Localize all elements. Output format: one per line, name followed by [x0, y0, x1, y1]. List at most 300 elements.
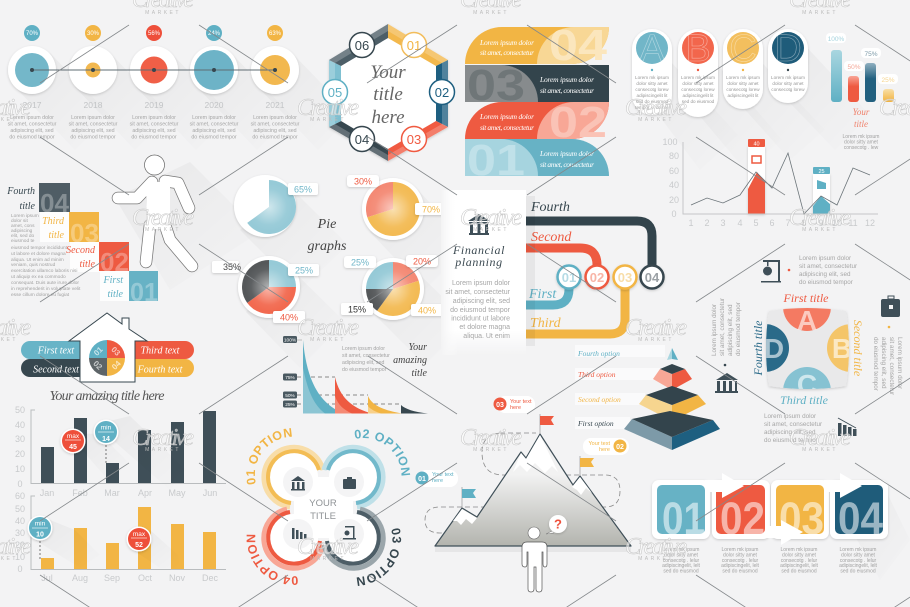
panel: timeline 2017-2021: adipiscing elit, sed	[10, 128, 54, 134]
chart: dark bars Jan-Jun: 14	[102, 436, 110, 443]
panel: mountain: 03	[496, 402, 504, 409]
chart: line chart 1-12: 5	[753, 218, 759, 228]
panel: square diagram A B C D: B	[832, 333, 852, 364]
panel: mountain: here	[432, 478, 443, 484]
panel: numbered steps with arrows: sed do eiusmod	[781, 568, 817, 574]
panel: square diagram A B C D: adipiscing elit, sed	[799, 271, 851, 278]
panel: ABCD pills: Lorem mk ipsum	[681, 75, 715, 80]
panel: stair steps with titles: ut aliquip ex ea commodo	[11, 274, 66, 280]
panel: stair steps with titles: dolor sit	[11, 218, 28, 224]
chart: cylinders: 100%	[828, 36, 845, 43]
panel: financial planning pipes: 04	[645, 270, 660, 285]
chart: dark bars Jan-Jun: 50	[15, 405, 25, 415]
panel: financial planning pipes: 03	[618, 270, 632, 285]
chart: curve peaks: Lorem ipsum dolor	[342, 346, 385, 352]
chart: line chart 1-12: 20	[669, 195, 679, 205]
panel: financial planning card: sit amet, consectetur	[445, 289, 511, 296]
panel: ABCD pills: adipiscingelit lit	[637, 93, 668, 98]
panel: timeline 2017-2021	[8, 25, 352, 150]
panel: mountain: here	[510, 405, 521, 411]
panel: ABCD pills: consecotg lorew	[681, 87, 715, 92]
panel: financial planning card	[441, 190, 535, 355]
chart: line chart 1-12: 2	[704, 218, 710, 228]
panel: four-option clover	[246, 428, 410, 586]
watermarks: MARKET	[310, 117, 346, 123]
panel: mountain: Your text	[510, 399, 532, 405]
chart: dark bars Jan-Jun: 0	[17, 479, 23, 489]
chart: dark bars Jan-Jun: max	[67, 433, 80, 440]
watermarks: Creative	[132, 425, 194, 451]
panel: numbered ribbons: 01	[467, 136, 525, 185]
chart: yellow bars Jul-Dec: 10	[36, 532, 44, 538]
panel: stair steps with titles: 03	[70, 218, 99, 248]
panel: hexagon: 04	[355, 132, 369, 147]
chart: curve peaks: 100%	[284, 338, 297, 344]
panel: stair steps with titles: Second	[66, 245, 96, 256]
panel: house with labels: Third text	[141, 346, 180, 356]
icon: briefcase	[881, 296, 900, 317]
panel: timeline 2017-2021: Lorem ipsum dolor	[10, 115, 54, 121]
panel: square diagram A B C D: do eiusmod tempor	[872, 337, 879, 391]
watermarks: MARKET	[310, 556, 346, 562]
panel: house with labels	[21, 313, 194, 404]
panel: financial planning card: aliqua. Ut enim	[463, 333, 510, 340]
panel: square diagram A B C D: Fourth title	[751, 320, 765, 376]
watermarks: MARKET	[473, 10, 509, 16]
panel: timeline 2017-2021: do eiusmod tempor	[9, 134, 55, 140]
panel: timeline 2017-2021: do eiusmod tempor	[70, 134, 116, 140]
panel: timeline 2017-2021: Lorem ipsum dolor	[192, 115, 236, 121]
panel: numbered steps with arrows: dolor sitty amet	[723, 552, 758, 558]
icon: running person	[115, 155, 260, 290]
panel: timeline 2017-2021: Lorem ipsum dolor	[253, 115, 297, 121]
panel: ABCD pills: sed do eiusmod	[682, 99, 715, 104]
panel: house with labels: 02	[91, 359, 104, 372]
panel: square diagram A B C D: Lorem ipsum dolor	[711, 304, 718, 356]
panel: numbered steps with arrows: Lorem mk ipsum	[722, 547, 758, 553]
panel: numbered ribbons: 03	[467, 61, 525, 110]
chart: line chart 1-12: 7	[785, 218, 791, 228]
chart: pie 70/30: 70%	[422, 204, 440, 214]
panel: house with labels: First text	[37, 346, 74, 356]
watermarks: Creative	[460, 205, 522, 231]
panel: financial planning pipes: Third	[530, 316, 562, 331]
chart: yellow bars Jul-Dec: 30	[15, 528, 25, 538]
panel: stair steps with titles: Fourth	[6, 186, 35, 197]
panel: stair steps with titles: title	[48, 230, 65, 241]
chart: yellow bars Jul-Dec: min	[35, 520, 46, 528]
chart: curve peaks: Your	[408, 342, 427, 353]
chart: yellow bars Jul-Dec: 20	[15, 540, 25, 550]
chart: dark bars Jan-Jun: 20	[15, 449, 25, 459]
watermarks: MARKET	[310, 337, 346, 343]
panel: numbered steps with arrows: dolor sitty amet	[841, 552, 876, 558]
panel: stair steps with titles: in reprehenderit in voluptate velit	[11, 286, 81, 292]
panel: hexagon	[322, 24, 454, 161]
panel: stair steps with titles: First	[103, 275, 123, 286]
panel: four-option clover: 04 OPTION	[246, 534, 298, 585]
panel: financial planning card: Lorem ipsum dolor	[452, 280, 511, 287]
panel: stair steps with titles: amet, cons	[11, 223, 35, 229]
panel: square diagram A B C D: do eiusmod tempor	[735, 302, 742, 356]
panel: stair steps with titles	[6, 183, 158, 307]
watermarks: Creative	[297, 315, 359, 341]
panel: financial planning pipes: Second	[531, 230, 572, 245]
panel: ABCD pills: Lorem mk ipsum	[635, 75, 669, 80]
panel: financial planning card: planning	[454, 255, 503, 269]
chart: cylinders: consecotg . lew	[844, 145, 879, 151]
watermarks: MARKET	[473, 447, 509, 453]
panel: four-option clover: YOUR	[309, 498, 337, 509]
panel: pyramid: First option	[577, 419, 614, 428]
panel: ABCD pills: Lorem mk ipsum	[771, 75, 805, 80]
panel: house with labels: Second text	[33, 364, 79, 376]
panel: numbered steps with arrows: consecotg . lelur	[840, 558, 877, 564]
panel: financial planning pipes: 01	[562, 270, 576, 285]
panel: stair steps with titles: consequat. Duis aute irure dolor	[11, 280, 79, 286]
panel: hexagon: Your	[370, 62, 406, 83]
panel: hexagon: 05	[328, 85, 342, 100]
panel: square diagram A B C D: adipiscing elit, sed	[880, 337, 887, 389]
panel: stair steps with titles: title	[19, 201, 36, 212]
panel: ABCD pills: dolor sitty amet	[636, 81, 668, 86]
panel: financial planning pipes: First	[528, 287, 557, 302]
panel: timeline 2017-2021: 2018	[84, 100, 103, 110]
panel: timeline 2017-2021: 2020	[205, 100, 224, 110]
panel: numbered steps with arrows: sed do eiusmod	[722, 568, 758, 574]
panel: house with labels: 01	[92, 345, 105, 358]
chart: curve peaks: adipiscing elit, sed	[342, 360, 385, 366]
panel: pyramid: Third option	[578, 370, 616, 379]
chart: dark bars Jan-Jun: 30	[15, 434, 25, 444]
panel: mountain: Your text	[432, 472, 454, 478]
panel: hexagon: 02	[435, 85, 449, 100]
panel: hexagon: here	[371, 107, 405, 128]
chart: pie 20/40/15/25: 20%	[413, 256, 431, 266]
chart: yellow bars Jul-Dec: 0	[17, 564, 23, 574]
panel: numbered ribbons: Lorem ipsum dolor	[539, 75, 594, 84]
panel: stair steps with titles: eiusmod tempor incididunt	[11, 245, 68, 251]
panel: timeline 2017-2021: do eiusmod tempor	[191, 134, 237, 140]
chart: line chart 1-12: 100	[662, 137, 678, 147]
panel: ABCD pills: consecotg lorew	[726, 87, 760, 92]
panel: stair steps with titles: elit, sed do	[11, 233, 35, 239]
panel: numbered steps with arrows: 02	[720, 493, 765, 544]
panel: stair steps with titles: esse cillum dolore eu fugiat	[11, 292, 70, 298]
panel: four-option clover: TITLE	[310, 511, 336, 522]
panel: numbered steps with arrows: 01	[662, 493, 705, 544]
panel: timeline 2017-2021: adipiscing elit, sed	[192, 128, 236, 134]
panel: ABCD pills: D	[774, 28, 802, 70]
panel: ABCD pills: Lorem mk ipsum	[726, 75, 760, 80]
panel: timeline 2017-2021: 2021	[266, 100, 285, 110]
panel: stair steps with titles: 04	[40, 188, 70, 218]
watermarks: MARKET	[638, 337, 674, 343]
chart: dark bars Jan-Jun: Feb	[72, 488, 88, 498]
panel: timeline 2017-2021: sit amet, consectetur	[130, 122, 179, 128]
icon: crane	[761, 260, 781, 282]
panel: financial planning pipes: 02	[590, 270, 604, 285]
panel: numbered ribbons: sit amet, consectetur	[480, 123, 534, 132]
panel: ABCD pills: B	[685, 28, 711, 70]
panel: numbered ribbons: 04	[549, 21, 608, 70]
panel: mountain: 01	[418, 476, 426, 483]
chart: yellow bars Jul-Dec: Jul	[41, 573, 53, 583]
chart: curve peaks: 75%	[285, 375, 296, 381]
panel: hexagon: 03	[407, 132, 421, 147]
chart: pie 65%: 65%	[294, 184, 312, 194]
chart: pie 20/40/15/25: 40%	[418, 306, 436, 316]
panel: timeline 2017-2021: 30%	[87, 31, 100, 37]
panel: timeline 2017-2021: 2019	[145, 100, 164, 110]
watermarks: Creative	[625, 315, 687, 341]
panel: numbered steps with arrows: consecotg . lelur	[722, 558, 759, 564]
watermarks: MARKET	[802, 227, 838, 233]
chart: dark bars Jan-Jun: min	[101, 424, 112, 432]
panel: house with labels: 03	[109, 345, 122, 358]
chart: yellow bars Jul-Dec: 52	[135, 542, 143, 549]
panel: ABCD pills	[632, 28, 870, 170]
panel: square diagram A B C D: First title	[782, 291, 829, 305]
watermarks: MARKET	[145, 227, 181, 233]
panel: pyramid: Second option	[578, 395, 621, 404]
panel: square diagram A B C D: D	[764, 333, 784, 364]
panel: timeline 2017-2021: adipiscing elit, sed	[253, 128, 297, 134]
panel: ABCD pills: dolor sitty amet	[772, 81, 804, 86]
watermarks: Creative	[789, 425, 851, 451]
chart: line chart 1-12: 1	[688, 218, 694, 228]
icon: descending bars	[838, 418, 856, 436]
panel: pyramid	[575, 345, 720, 450]
chart: pie 65%	[233, 175, 319, 240]
panel: mountain: Your text	[588, 441, 610, 447]
chart: curve peaks: 50%	[285, 393, 296, 399]
panel: timeline 2017-2021: adipiscing elit, sed	[132, 128, 176, 134]
chart: dark bars Jan-Jun	[15, 405, 226, 498]
watermarks: MARKET	[638, 556, 674, 562]
chart: line chart 1-12	[662, 137, 878, 228]
panel: timeline 2017-2021: Lorem ipsum dolor	[132, 115, 176, 121]
panel: numbered steps with arrows: adipiscingelit, lelt	[839, 563, 878, 569]
panel: hexagon: 06	[355, 38, 369, 53]
panel: numbered ribbons: Lorem ipsum dolor	[479, 38, 534, 47]
chart: yellow bars Jul-Dec: max	[133, 531, 146, 538]
panel: numbered steps with arrows: adipiscingelit, lelt	[721, 563, 760, 569]
chart: yellow bars Jul-Dec: Nov	[169, 573, 185, 583]
panel: timeline 2017-2021: 24%	[208, 31, 221, 37]
chart: curve peaks: do eiusmod tempor	[342, 367, 387, 373]
panel: numbered steps with arrows: dolor sitty amet	[782, 552, 817, 558]
chart: cylinders: 50%	[847, 64, 861, 71]
panel: four-option clover: 02 OPTION	[354, 429, 410, 476]
chart: pie 25/40/35	[212, 256, 345, 368]
chart: line chart 1-12: 3	[720, 218, 726, 228]
text: pie graphs title: graphs	[308, 239, 347, 254]
panel: ABCD pills: adipiscingelit lit	[683, 93, 714, 98]
panel: numbered steps with arrows: adipiscingelit, lelt	[780, 563, 819, 569]
chart: pie 25/40/35: 25%	[295, 266, 313, 276]
panel: financial planning card: adipiscing elit, sed	[453, 298, 510, 305]
chart: cylinders: title	[854, 119, 868, 129]
panel: numbered steps with arrows: Lorem mk ipsum	[840, 547, 876, 553]
panel: ABCD pills: dolor sitty amet	[682, 81, 714, 86]
chart: dark bars Jan-Jun: 45	[69, 444, 77, 451]
panel: numbered steps with arrows: sed do eiusmod	[663, 568, 699, 574]
panel: square diagram A B C D	[711, 255, 903, 444]
panel: timeline 2017-2021: 56%	[148, 31, 161, 37]
panel: hexagon: title	[373, 84, 403, 105]
panel: square diagram A B C D: sit amet, consectetur	[799, 263, 857, 270]
watermarks: MARKET	[638, 117, 674, 123]
chart: yellow bars Jul-Dec: Oct	[138, 573, 152, 583]
panel: stair steps with titles: ut labore et dolore magna	[11, 251, 66, 257]
chart: line chart 1-12: 40	[669, 180, 679, 190]
chart: line chart 1-12: 11	[848, 218, 858, 228]
watermarks: MARKET	[145, 10, 181, 16]
chart: cylinders	[826, 33, 898, 151]
panel: numbered ribbons: Lorem ipsum dolor	[539, 149, 594, 158]
watermarks: Creative	[132, 205, 194, 231]
chart: pie 20/40/15/25: 25%	[351, 258, 369, 268]
watermarks: Creative	[297, 95, 359, 121]
chart: curve peaks	[283, 336, 428, 414]
icon: bank	[715, 373, 738, 393]
panel: square diagram A B C D: do eiusmod tempor	[764, 437, 818, 444]
panel: stair steps with titles: aliqua. Ut enim ad minim	[11, 257, 64, 263]
chart: curve peaks: title	[411, 368, 428, 379]
panel: numbered ribbons: 02	[549, 98, 607, 147]
panel: pyramid: Fourth option	[577, 349, 620, 358]
panel: square diagram A B C D: Lorem ipsum dolor	[799, 255, 851, 262]
chart: pie 70/30: 30%	[354, 176, 372, 186]
watermarks: MARKET	[802, 10, 838, 16]
panel: numbered steps with arrows: sed do eiusmod	[840, 568, 876, 574]
chart: cylinders: Your	[853, 107, 870, 117]
chart: yellow bars Jul-Dec: Dec	[202, 573, 218, 583]
panel: financial planning card: incididunt ut labore	[451, 316, 510, 322]
chart: yellow bars Jul-Dec: 50	[15, 504, 25, 514]
chart: line chart 1-12: 12	[865, 218, 875, 228]
panel: ABCD pills: tempor et dolore	[635, 105, 669, 110]
chart: line chart 1-12: 9	[818, 218, 824, 228]
chart: pie 25/40/35: 35%	[223, 262, 241, 272]
panel: ABCD pills: C	[729, 28, 757, 70]
panel: numbered steps with arrows: adipiscingelit, lelt	[662, 563, 701, 569]
text: pie graphs title: Pie	[317, 217, 336, 232]
panel: stair steps with titles: eiusmod te	[11, 238, 35, 244]
panel: timeline 2017-2021: adipiscing elit, sed	[71, 128, 115, 134]
panel: house with labels: Your amazing title here	[50, 389, 164, 404]
panel: square diagram A B C D: Second title	[851, 320, 865, 377]
chart: yellow bars Jul-Dec: 10	[15, 552, 25, 562]
panel: ABCD pills: dolor sitty amet	[727, 81, 759, 86]
panel: ABCD pills: adipiscingelit lit	[728, 93, 759, 98]
panel: financial planning pipes: Fourth	[530, 200, 570, 215]
chart: pie 20/40/15/25: 15%	[348, 304, 366, 314]
panel: four-option clover: 01 OPTION	[246, 428, 292, 484]
chart: line chart 1-12: 0	[671, 209, 677, 219]
watermarks: MARKET	[802, 447, 838, 453]
panel: square diagram A B C D: sit amet, consectetur	[764, 421, 822, 428]
chart: pie 20/40/15/25	[341, 255, 468, 365]
panel: timeline 2017-2021: sit amet, consectetur	[8, 122, 57, 128]
chart: yellow bars Jul-Dec: Sep	[104, 573, 120, 583]
chart: line chart 1-12: 8	[801, 218, 807, 228]
panel: numbered ribbons: Lorem ipsum dolor	[479, 112, 534, 121]
chart: line chart 1-12: 4	[737, 218, 743, 228]
chart: pie 70/30	[347, 175, 470, 290]
chart: dark bars Jan-Jun: Jan	[40, 488, 54, 498]
panel: square diagram A B C D: C	[797, 369, 817, 400]
panel: square diagram A B C D: sit amet, consectetur	[719, 298, 726, 356]
panel: timeline 2017-2021: do eiusmod tempor	[131, 134, 177, 140]
panel: numbered steps with arrows: 04	[838, 493, 883, 544]
panel: numbered steps with arrows	[652, 473, 910, 580]
panel: ABCD pills: A	[639, 28, 665, 70]
panel: house with labels: Fourth text	[137, 364, 183, 376]
panel: ABCD pills: consecotg lorew	[635, 87, 669, 92]
panel: financial planning card: Financial	[452, 243, 505, 257]
panel: four-option clover: 03 OPTION	[356, 528, 402, 586]
panel: mountain: here	[599, 447, 610, 453]
panel: numbered steps with arrows: consecotg . lelur	[781, 558, 818, 564]
icon: standing person with question	[522, 515, 567, 592]
chart: dark bars Jan-Jun: 10	[15, 464, 25, 474]
watermarks: Creative	[789, 205, 851, 231]
panel: stair steps with titles: exercitation ullamco laboris nisi	[11, 268, 77, 274]
panel: timeline 2017-2021: do eiusmod tempor	[252, 134, 298, 140]
chart: yellow bars Jul-Dec	[15, 491, 226, 583]
watermarks: Creative	[625, 534, 687, 560]
panel: numbered ribbons: sit amet, consectetur	[540, 160, 594, 169]
panel: timeline 2017-2021: 63%	[269, 31, 282, 37]
panel: numbered steps with arrows: Lorem mk ipsum	[663, 547, 699, 553]
panel: financial planning card: et dolore magna	[459, 324, 510, 331]
panel: stair steps with titles: 01	[130, 277, 158, 307]
icon: standing person with question: ?	[554, 516, 562, 532]
panel: square diagram A B C D: Lorem ipsum dolor	[896, 337, 903, 389]
panel: timeline 2017-2021: 2017	[23, 100, 42, 110]
chart: cylinders: 25%	[881, 77, 895, 84]
chart: cylinders: Lorem mk ipsum	[843, 134, 879, 140]
panel: timeline 2017-2021: sit amet, consectetur	[190, 122, 239, 128]
chart: line chart 1-12: 10	[832, 218, 842, 228]
chart: line chart 1-12: 80	[669, 151, 679, 161]
panel: numbered steps with arrows: Lorem mk ipsum	[781, 547, 817, 553]
panel: mountain: 02	[616, 444, 624, 451]
panel: stair steps with titles: 02	[100, 247, 129, 277]
panel: numbered steps with arrows: dolor sitty amet	[664, 552, 699, 558]
panel: stair steps with titles: title	[107, 289, 124, 300]
panel: stair steps with titles: adipiscing	[11, 228, 33, 234]
chart: curve peaks: 25%	[285, 402, 296, 408]
panel: square diagram A B C D: adipiscing elit, sed	[764, 429, 816, 436]
chart: dark bars Jan-Jun: Jun	[203, 488, 217, 498]
chart: dark bars Jan-Jun: Apr	[138, 488, 152, 498]
chart: pie 25/40/35: 40%	[280, 312, 298, 322]
panel: timeline 2017-2021: Lorem ipsum dolor	[71, 115, 115, 121]
panel: numbered ribbons: sit amet, consectetur	[540, 86, 594, 95]
panel: numbered ribbons: sit amet, consectetur	[480, 48, 534, 57]
chart: yellow bars Jul-Dec: Aug	[72, 573, 88, 583]
chart: line chart 1-12: 25	[818, 169, 825, 175]
panel: square diagram A B C D: Third title	[780, 393, 829, 407]
panel: square diagram A B C D: sit amet, consectetur	[888, 337, 895, 395]
chart: curve peaks: amazing	[393, 355, 427, 366]
panel: timeline 2017-2021: 70%	[26, 31, 39, 37]
panel: ABCD pills: sed do eiusmod	[636, 99, 669, 104]
chart: cylinders: dolor sitty amet	[844, 140, 879, 146]
